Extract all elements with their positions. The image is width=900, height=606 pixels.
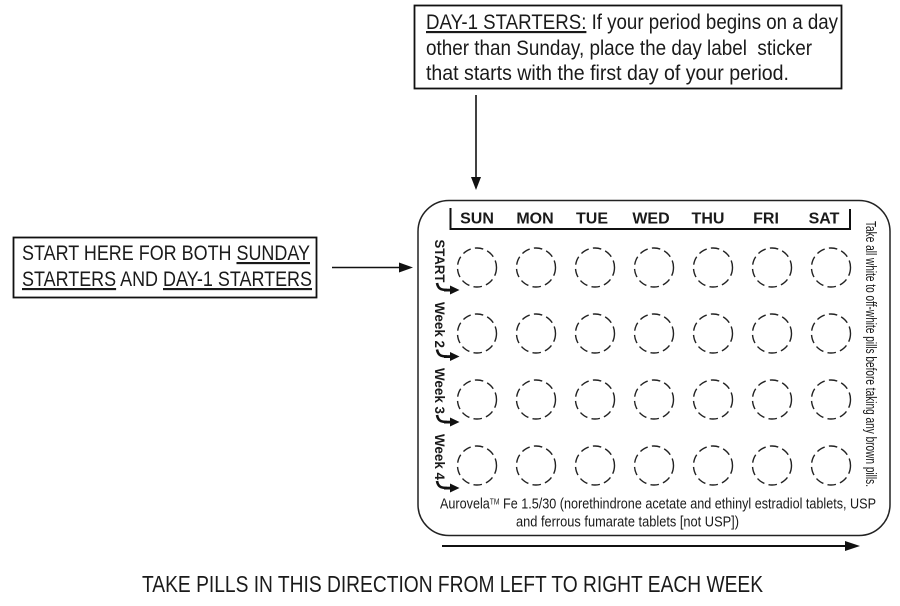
callout: day-1 starters xyxy=(414,6,842,88)
product name text: TM xyxy=(490,498,500,506)
arrow: callout down to pill pack xyxy=(471,95,481,190)
pill grid: dashed circles xyxy=(458,248,850,485)
product name text xyxy=(440,496,876,530)
day header row: WED xyxy=(632,210,670,228)
arrow: start here to pill pack xyxy=(332,262,413,272)
product name text: and ferrous fumarate tablets [not USP]) xyxy=(516,514,739,530)
day header row: THU xyxy=(692,210,724,228)
callout: day-1 starters: DAY-1 STARTERS: If your period begins on a day xyxy=(426,10,838,34)
day header row: SUN xyxy=(460,210,494,228)
week labels, rotated xyxy=(432,240,447,480)
caption: take pills direction: TAKE PILLS IN THIS DIRECTION FROM LEFT TO RIGHT EACH WEEK xyxy=(142,571,763,597)
panel: pill pack card xyxy=(418,200,890,536)
week arrows xyxy=(437,283,460,492)
callout: start here: STARTERS AND DAY-1 STARTERS xyxy=(22,267,312,291)
product name text: Aurovela xyxy=(440,496,499,512)
callout: start here: START HERE FOR BOTH SUNDAY xyxy=(22,241,310,265)
day header row: FRI xyxy=(753,210,779,228)
callout: day-1 starters: that starts with the first day of your period. xyxy=(426,61,789,85)
arrow: direction left to right xyxy=(442,541,860,551)
week labels, rotated: Week 3 xyxy=(432,368,447,414)
day header row: SAT xyxy=(809,210,840,228)
day header row xyxy=(450,208,850,229)
week labels, rotated: Week 2 xyxy=(432,302,447,348)
side instruction text, rotated: Take all white to off-white pills before taking any brown pills. xyxy=(862,221,878,487)
week labels, rotated: START xyxy=(432,240,447,283)
week labels, rotated: Week 4 xyxy=(432,434,447,480)
callout: start here xyxy=(14,238,316,298)
day header row: TUE xyxy=(576,210,608,228)
day header row: MON xyxy=(516,210,554,228)
callout: day-1 starters: other than Sunday, place the day label sticker xyxy=(426,36,812,60)
